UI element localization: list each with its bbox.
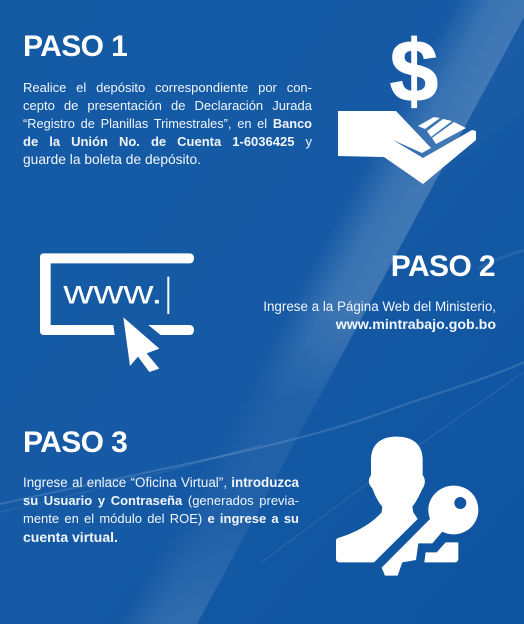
text block: Paso 3 instructions: su Usuario y Contraseña (generados previa- xyxy=(23,493,299,508)
text block: Paso 3 instructions: cuenta virtual. xyxy=(23,529,118,545)
text block: Paso 1 instructions: guarde la boleta de depósito. xyxy=(23,152,201,167)
text block: Paso 1 instructions: Realice el depósito correspondiente por con- xyxy=(23,80,312,95)
icon: www address box with cursor: www. xyxy=(62,274,163,311)
text block: Paso 2 instructions: Ingrese a la Página Web del Ministerio, xyxy=(263,299,496,314)
text block: Paso 2 instructions: www.mintrabajo.gob.bo xyxy=(336,317,496,333)
text block: Paso 1 instructions xyxy=(23,80,312,167)
text block: Paso 3 instructions xyxy=(23,475,300,545)
text block: Paso 1 instructions: “Registro de Planillas Trimestrales”, en el Banco xyxy=(23,116,312,131)
text block: Paso 1 instructions: cepto de presentación de Declaración Jurada xyxy=(23,98,312,113)
text block: Paso 1 instructions: de la Unión No. de Cuenta 1-6036425 y xyxy=(23,134,312,149)
heading: Paso 1: PASO 1 xyxy=(23,30,127,63)
icon: hand holding dollar and bills: $ xyxy=(390,23,438,120)
heading: Paso 2: PASO 2 xyxy=(391,250,495,283)
text block: Paso 3 instructions: mente en el módulo del ROE) e ingrese a su xyxy=(23,511,299,526)
text block: Paso 3 instructions: Ingrese al enlace “Oficina Virtual”, introduzca xyxy=(23,475,299,490)
text block: Paso 2 instructions xyxy=(263,299,496,333)
heading: Paso 3: PASO 3 xyxy=(23,426,127,459)
